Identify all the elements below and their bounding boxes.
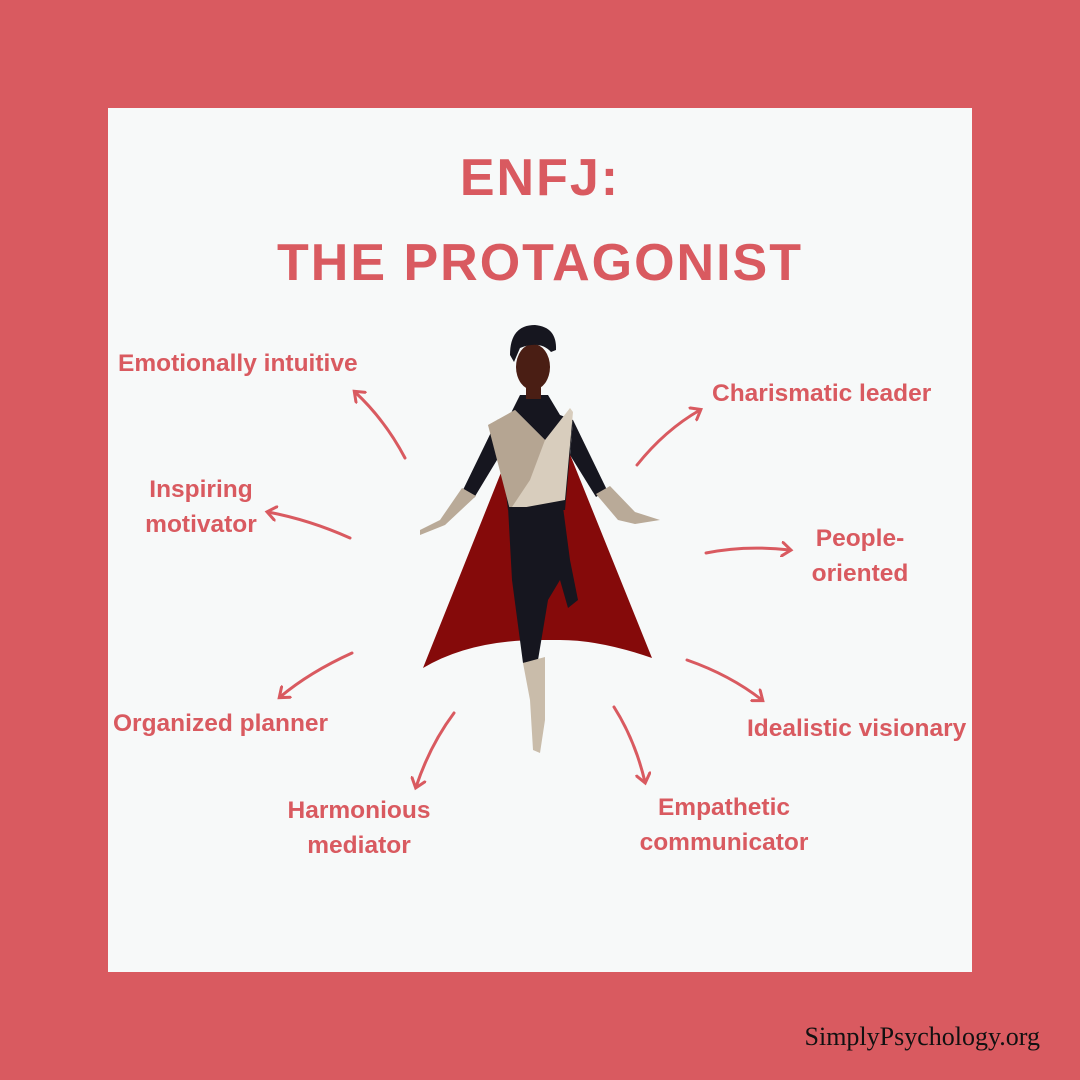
label: Inspiring motivator: motivator bbox=[145, 511, 257, 538]
title bbox=[277, 149, 803, 292]
label: Harmonious mediator: Harmonious bbox=[288, 797, 430, 824]
title: ENFJ: bbox=[460, 149, 620, 207]
arrows bbox=[268, 392, 790, 787]
label: Idealistic visionary: Idealistic visionary bbox=[747, 715, 966, 742]
label: Charismatic leader: Charismatic leader bbox=[712, 380, 931, 407]
label: People-oriented: oriented bbox=[812, 560, 908, 587]
label: Harmonious mediator bbox=[288, 797, 430, 859]
label: Empathetic communicator bbox=[640, 794, 808, 856]
label: People-oriented bbox=[812, 525, 908, 587]
label: People-oriented: People- bbox=[816, 525, 904, 552]
label: Empathetic communicator: communicator bbox=[640, 829, 808, 856]
panel: white card bbox=[108, 108, 972, 972]
label: Inspiring motivator: Inspiring bbox=[149, 476, 253, 503]
label: Empathetic communicator: Empathetic bbox=[658, 794, 790, 821]
footer: source: SimplyPsychology.org bbox=[805, 1022, 1040, 1051]
label: Emotionally intuitive: Emotionally intuitive bbox=[118, 350, 358, 377]
label: Organized planner: Organized planner bbox=[113, 710, 328, 737]
title: THE PROTAGONIST bbox=[277, 234, 803, 292]
label: Inspiring motivator bbox=[145, 476, 257, 538]
figure: hero bbox=[420, 325, 660, 753]
label: Harmonious mediator: mediator bbox=[307, 832, 411, 859]
